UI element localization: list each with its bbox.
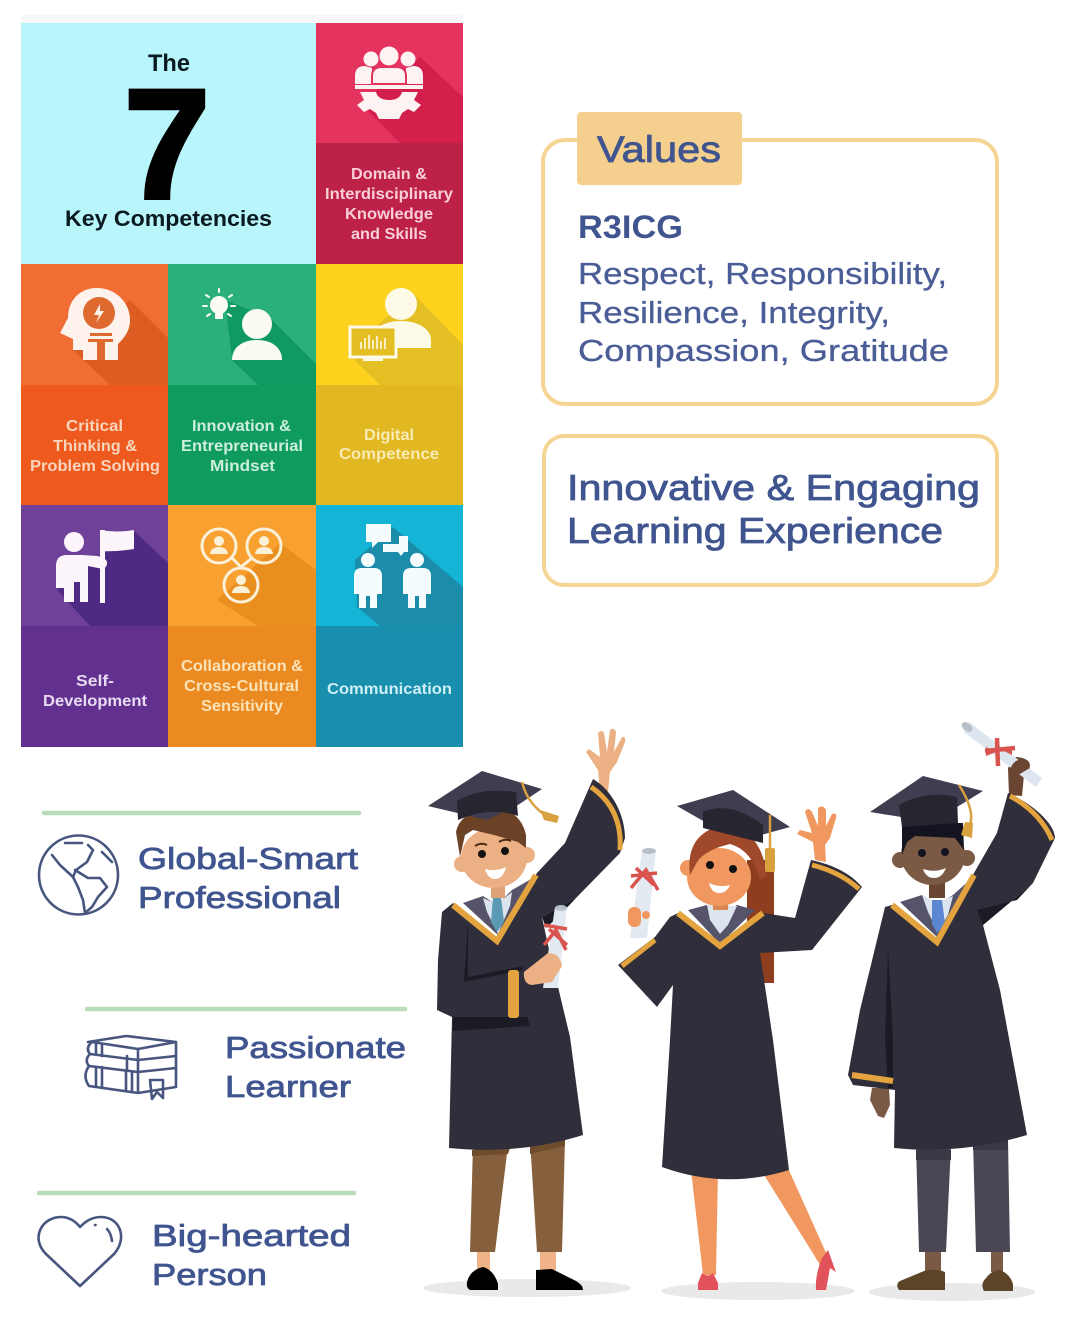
panel: self-development (21, 505, 168, 747)
legs (467, 1136, 583, 1290)
panel: innovative and engaging learning experience: Learning Experience (567, 510, 943, 551)
label: digital competence: Digital (364, 427, 414, 444)
panel: domain and interdisciplinary knowledge (316, 23, 463, 264)
text: list of values: Compassion, Gratitude (578, 333, 949, 368)
label: digital competence (339, 427, 439, 463)
panel: digital competence (316, 264, 463, 505)
label: innovation (181, 418, 303, 475)
label: domain: and Skills (351, 226, 427, 243)
label: self-development (43, 673, 148, 710)
neck and head (491, 880, 505, 898)
label: domain: Domain & (351, 166, 427, 183)
label: self-development: Development (43, 693, 148, 710)
label: critical thinking: Problem Solving (30, 458, 160, 475)
legs and shoes (897, 1136, 1013, 1291)
icon: head with lightbulb (60, 288, 130, 360)
label: domain: Interdisciplinary (325, 186, 453, 203)
icon: person with lightbulb (203, 289, 282, 360)
label: innovation: Innovation & (192, 418, 291, 435)
gown (618, 860, 862, 1179)
label: collaboration: Sensitivity (201, 698, 283, 715)
text: big-hearted person (152, 1218, 351, 1292)
text: list of values: Respect, Responsibility, (578, 256, 947, 291)
long hair (747, 860, 774, 983)
panel: critical thinking (21, 264, 168, 505)
text: list of values (578, 256, 949, 368)
label: critical thinking: Critical (66, 418, 123, 435)
text: global-smart professional (138, 841, 358, 915)
attribute: global-smart professional (39, 813, 359, 915)
label: communication: Communication (327, 681, 452, 698)
raised hand (1008, 757, 1030, 796)
title: Key Competencies: Key Competencies (65, 206, 272, 231)
icon: heart (39, 1217, 121, 1286)
tab: values heading (577, 112, 742, 185)
collar and stole (463, 878, 533, 936)
panel: values (543, 112, 997, 404)
text: passionate learner: Passionate (225, 1030, 406, 1065)
text: list of values: Resilience, Integrity, (578, 295, 890, 330)
diploma (630, 850, 656, 938)
label: domain: Knowledge (345, 206, 433, 223)
graduate: left man (423, 729, 631, 1297)
text: big-hearted person: Big-hearted (152, 1218, 351, 1253)
graduation cap (870, 776, 983, 820)
panel: innovative and engaging learning experience: Innovative & Engaging (567, 467, 980, 508)
diploma (964, 722, 1042, 787)
icon: person with flag (56, 530, 134, 603)
graduation cap (677, 790, 790, 838)
label: critical thinking: Thinking & (53, 438, 137, 455)
title: The: The (148, 50, 190, 77)
title: big 7: 7 (124, 58, 210, 232)
label: critical thinking (30, 418, 160, 475)
label: domain (325, 166, 453, 243)
icon: stack of books (86, 1036, 176, 1099)
icon: person with monitor (350, 288, 431, 361)
label: innovation: Mindset (210, 458, 276, 475)
graduate: middle woman (618, 790, 862, 1300)
lower hand (870, 1088, 890, 1118)
text: passionate learner (225, 1030, 406, 1104)
panel: communication (316, 505, 463, 747)
panel: innovation (168, 264, 316, 505)
holding hand (524, 953, 562, 985)
label: self-development: Self- (76, 673, 114, 690)
text: global-smart professional: Professional (138, 880, 341, 915)
legs and heels (691, 1168, 836, 1290)
tab: values heading: Values (597, 129, 721, 170)
graduation cap (428, 771, 542, 820)
panel: 7 key competencies grid (21, 23, 463, 747)
gown (437, 779, 625, 1150)
raised hand (797, 806, 836, 862)
diploma (543, 907, 567, 988)
label: innovation: Entrepreneurial (181, 438, 303, 455)
icon: team and gear (355, 46, 423, 119)
label: digital competence: Competence (339, 446, 439, 463)
heading: R3ICG: R3ICG (578, 209, 683, 245)
head (713, 895, 728, 910)
collar and stole (900, 878, 972, 938)
panel: title cell (21, 23, 316, 264)
gown (848, 793, 1055, 1150)
icon: globe (39, 836, 118, 914)
label: collaboration: Collaboration & (181, 658, 303, 675)
label: collaboration (181, 658, 303, 715)
text: big-hearted person: Person (152, 1257, 267, 1292)
panel: collaboration (168, 505, 316, 747)
attribute: passionate learner (86, 1009, 406, 1104)
holding hand (628, 907, 641, 927)
text: global-smart professional: Global-Smart (138, 841, 358, 876)
raised hand (586, 729, 625, 792)
label: collaboration: Cross-Cultural (184, 678, 299, 695)
head (929, 880, 945, 898)
collar and stole (688, 905, 755, 944)
icon: two people talking (354, 524, 431, 608)
graduate: right man (848, 720, 1055, 1301)
illustration: three graduates (423, 720, 1055, 1301)
panel: innovative and engaging learning experience (544, 436, 997, 585)
icon: connected people circles (202, 529, 281, 602)
text: passionate learner: Learner (225, 1069, 351, 1104)
attribute: big-hearted person (39, 1193, 354, 1292)
